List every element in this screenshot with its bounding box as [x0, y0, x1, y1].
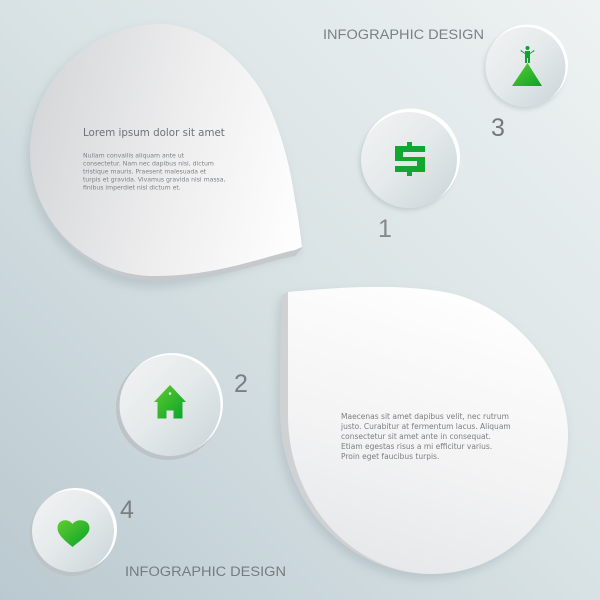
text block: bottom-right body: consectetur sit amet ante in consequat. — [341, 432, 491, 441]
disc 3: mountain — [484, 24, 568, 110]
disc 1: dollar — [359, 108, 460, 210]
text block: top-left body: consectetur. Nam nec dapibus nisi, dictum — [83, 160, 214, 168]
icon: person on peak — [512, 63, 542, 86]
title: bottom infographic design: INFOGRAPHIC DESIGN — [125, 564, 286, 579]
text block: top-left body: turpis et gravida. Vivamus gravida nisi massa, — [83, 176, 225, 184]
number 2: 2 — [234, 370, 248, 398]
disc 2: home — [116, 353, 223, 460]
text block: top-left body: finibus imperdiet nisl dictum et. — [83, 184, 181, 192]
number 1: 1 — [378, 215, 392, 243]
text block: bottom-right body: Maecenas sit amet dapibus velit, nec rutrum — [341, 412, 509, 421]
icon: heart — [58, 520, 90, 547]
panel: bottom-right drop — [277, 287, 568, 579]
number 4: 4 — [120, 496, 134, 524]
text block: top-left body: tristique mauris. Praesent malesuada et — [83, 168, 207, 176]
disc 4: heart — [30, 488, 117, 576]
text block: bottom-right body — [340, 412, 511, 461]
text block: bottom-right body: Etiam egestas risus a mi efficitur varius. — [341, 442, 492, 451]
text block: top-left body: Nullam convallis aliquam ante ut — [83, 152, 185, 160]
text block: top-left body — [83, 152, 225, 192]
heading: lorem ipsum: Lorem ipsum dolor sit amet — [83, 127, 225, 139]
number 3: 3 — [491, 114, 505, 142]
icon: dollar — [395, 142, 425, 176]
panel: top-left drop — [27, 24, 302, 287]
title: top infographic design: INFOGRAPHIC DESIGN — [323, 27, 484, 42]
text block: bottom-right body: Proin eget faucibus turpis. — [341, 452, 439, 461]
text block: bottom-right body: justo. Curabitur at fermentum lacus. Aliquam — [340, 422, 511, 431]
icon: house — [154, 385, 186, 418]
